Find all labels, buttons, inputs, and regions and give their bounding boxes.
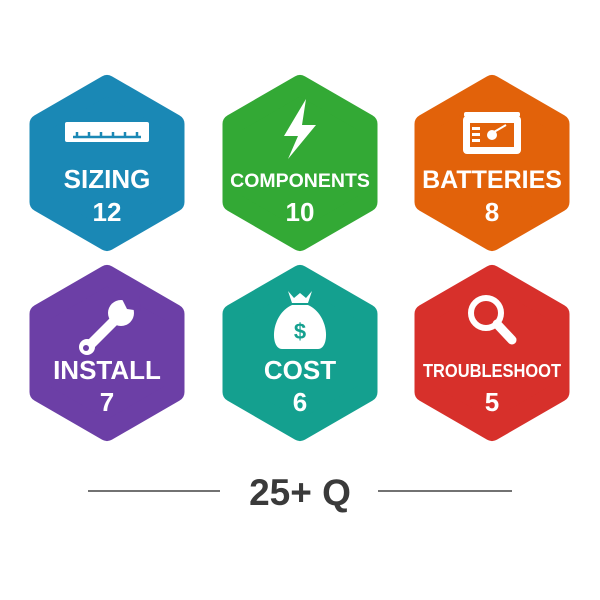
footer: total questions: 25+ Q bbox=[249, 472, 351, 513]
label: troubleshoot: TROUBLESHOOT bbox=[423, 361, 561, 381]
panel: sizing bbox=[40, 85, 174, 241]
label: components: COMPONENTS bbox=[230, 170, 370, 192]
panel: install bbox=[40, 275, 174, 431]
number: 10: 10 bbox=[286, 197, 314, 227]
panel: components bbox=[230, 85, 370, 241]
icon: lightning bbox=[284, 99, 316, 159]
label: batteries: BATTERIES bbox=[422, 166, 562, 194]
icon: battery bbox=[463, 112, 521, 154]
label: cost: COST bbox=[264, 355, 336, 385]
number: 5: 5 bbox=[485, 387, 499, 417]
icon: wrench bbox=[79, 295, 141, 355]
panel: batteries bbox=[422, 85, 562, 241]
label: sizing: SIZING bbox=[64, 164, 150, 194]
icon: ruler bbox=[65, 122, 149, 142]
number: 6: 6 bbox=[293, 387, 307, 417]
icon: magnifier bbox=[471, 298, 512, 340]
panel: cost bbox=[232, 275, 368, 431]
number: 8: 8 bbox=[485, 197, 499, 227]
icon: money bag bbox=[274, 291, 326, 349]
label: install: INSTALL bbox=[53, 355, 161, 385]
number: 7: 7 bbox=[100, 387, 114, 417]
panel: troubleshoot bbox=[423, 275, 561, 431]
icon: money bag: $ bbox=[294, 319, 306, 344]
number: 12: 12 bbox=[93, 197, 121, 227]
